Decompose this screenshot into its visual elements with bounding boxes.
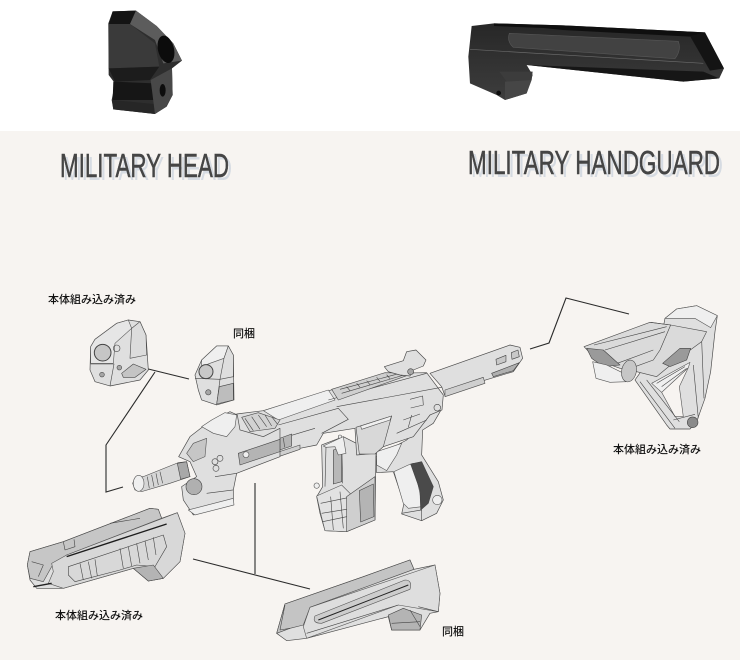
heading: military head (60, 147, 232, 187)
rifle part: magazine (314, 437, 376, 532)
photo: military handguard (468, 23, 724, 100)
rifle part: front sight (202, 413, 237, 437)
illustration: installed handguard (27, 508, 185, 588)
illustration: installed head (90, 320, 148, 386)
stock opening (662, 368, 688, 417)
illustration: stock (584, 306, 717, 429)
heading: military head: MILITARY HEAD (63, 150, 232, 187)
label: pre-installed head: 本体組み込み済み (48, 292, 136, 306)
rifle part: front block and muzzle (133, 412, 280, 515)
illustration: bundled head (195, 346, 234, 405)
rifle part: pistol grip (376, 408, 443, 521)
rifle part: side rail slot (233, 434, 300, 472)
leader line: handguards to rifle (193, 483, 310, 589)
label: pre-installed stock: 本体組み込み済み (613, 442, 701, 456)
heading: military head: MILITARY HEAD (60, 147, 229, 184)
leader line: head parts to muzzle (106, 365, 189, 492)
leader line: stock to rifle (530, 298, 629, 349)
rifle part: forward handguard (430, 345, 523, 397)
rifle part: rear sight (384, 350, 426, 376)
photo: military head (108, 11, 182, 114)
label: bundled handguard: 同梱 (442, 624, 464, 638)
label: bundled head: 同梱 (233, 326, 255, 340)
illustration: bundled handguard (277, 560, 440, 641)
illustration: rifle (133, 345, 523, 532)
rifle part: upper receiver (207, 350, 443, 473)
label: pre-installed handguard: 本体組み込み済み (55, 608, 143, 622)
